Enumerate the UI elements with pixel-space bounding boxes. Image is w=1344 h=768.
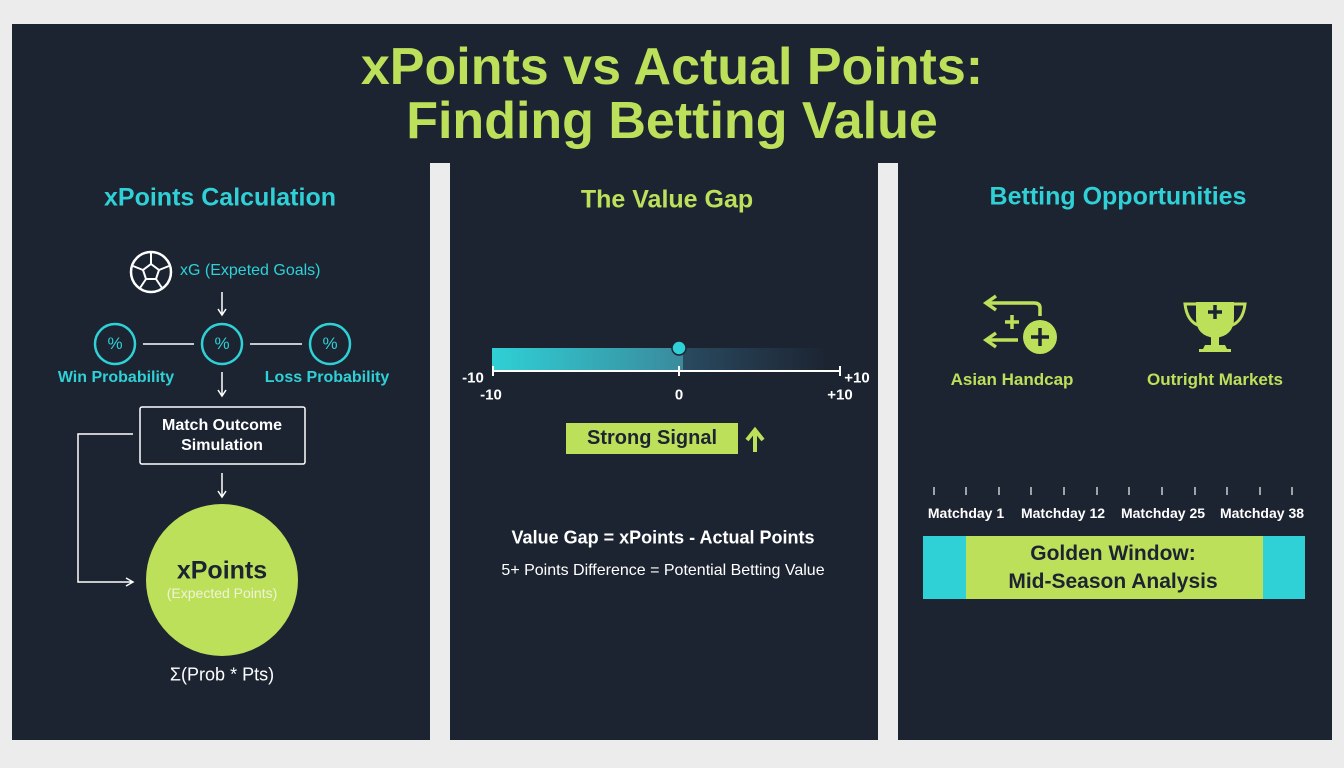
strong signal box [566, 423, 738, 454]
formula sum: Σ(Prob * Pts) [170, 664, 274, 684]
match outcome text: Simulation [181, 437, 263, 454]
xPoints text: xPoints [177, 556, 267, 584]
percent symbols: % [107, 334, 123, 353]
outright markets label: Outright Markets [1147, 370, 1283, 389]
text: Matchday 1 [928, 505, 1004, 521]
golden window text [1008, 542, 1218, 593]
title: xPoints vs Actual Points: [361, 38, 983, 96]
loss probability label: Loss Probability [265, 369, 389, 386]
text: +10 [844, 370, 870, 386]
title: Finding Betting Value [406, 92, 938, 150]
timeline ticks [934, 487, 1292, 495]
text: Matchday 38 [1220, 505, 1304, 521]
formula text: Value Gap = xPoints - Actual Points [512, 528, 814, 548]
asian handicap label: Asian Handcap [951, 370, 1073, 389]
text: -10 [462, 370, 484, 386]
text: 5+ Points Difference = Potential Betting Value [501, 562, 825, 579]
text: Matchday 12 [1021, 505, 1105, 521]
icon: trophy [1196, 302, 1234, 352]
panel: value gap heading: The Value Gap [581, 186, 753, 214]
arrows and connectors [78, 292, 302, 586]
text: (Expected Points) [167, 585, 277, 601]
text: % [214, 334, 230, 353]
text: -10 [480, 386, 502, 404]
golden window text: Golden Window: [1030, 542, 1196, 565]
xPoints circle [146, 504, 298, 656]
text: +10 [827, 386, 853, 404]
golden window bar [923, 536, 1305, 599]
text: Matchday 25 [1121, 505, 1205, 521]
xG label: xG (Expeted Goals) [180, 262, 320, 279]
text: 0 [675, 386, 683, 404]
box: match outcome [140, 407, 305, 464]
title [361, 38, 983, 150]
strong signal box: Strong Signal [587, 427, 717, 449]
percentage circles [95, 324, 350, 364]
panel: betting opportunities heading: Betting Opportunities [990, 182, 1246, 210]
match outcome text: Match Outcome [162, 417, 282, 434]
heading: xPoints Calculation [104, 184, 336, 212]
win probability label: Win Probability [58, 369, 174, 386]
icon: soccer ball [131, 252, 171, 292]
timeline labels [928, 505, 1304, 521]
divider strips [430, 163, 450, 740]
match outcome text [162, 417, 282, 454]
text: % [322, 334, 338, 353]
axis labels [462, 370, 870, 404]
icon: asian handicap [986, 296, 1040, 347]
golden window text: Mid-Season Analysis [1008, 570, 1218, 593]
arrow: strong signal up [747, 430, 763, 452]
